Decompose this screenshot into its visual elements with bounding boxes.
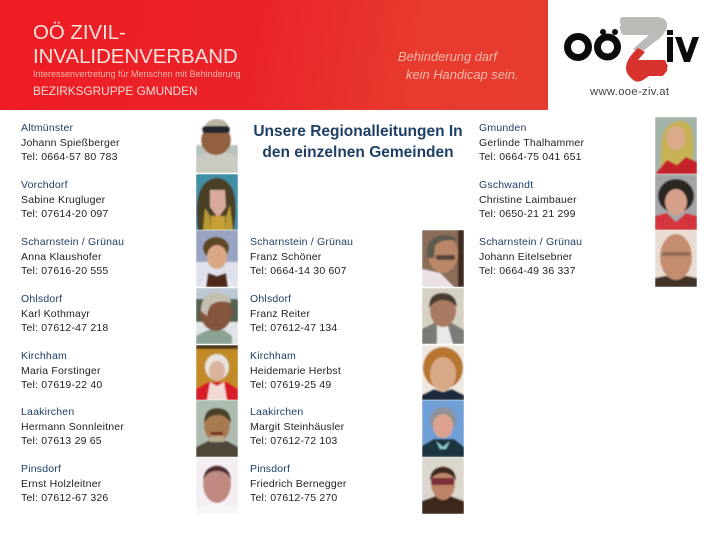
website: www.ooe-ziv.at: [590, 86, 669, 98]
contact: Scharnstein Schöner: Franz Schöner: [250, 250, 321, 262]
contact: Laakirchen Sonnleitner: [21, 406, 124, 447]
header banner: [0, 0, 548, 110]
contact: Altmünster: Altmünster: [21, 122, 73, 134]
photo: Eitelsebner: [655, 230, 697, 287]
contact: Scharnstein Eitelsebner: Scharnstein / Grünau: [479, 236, 582, 248]
contact: Ohlsdorf Reiter: Franz Reiter: [250, 308, 310, 320]
contact: Kirchham Herbst: Tel: 07619-25 49: [250, 379, 331, 391]
contact: Kirchham Herbst: [250, 350, 341, 391]
contact: Pinsdorf Bernegger: [250, 463, 347, 504]
heading: regional leaders: [253, 123, 463, 161]
contact: Kirchham Herbst: Kirchham: [250, 350, 296, 362]
contact: Laakirchen Sonnleitner: Laakirchen: [21, 406, 74, 418]
letters iv: [667, 30, 699, 62]
photo: Schöner: [422, 230, 464, 287]
contact: Kirchham Forstinger: Maria Forstinger: [21, 364, 101, 376]
organisation name: INVALIDENVERBAND: [33, 46, 238, 68]
photo: Laimbauer: [655, 174, 697, 230]
contact: Laakirchen Steinhäusler: Margit Steinhäusler: [250, 420, 344, 432]
heading: regional leaders: Unsere Regionalleitungen In: [253, 123, 463, 140]
organisation name: [33, 22, 238, 68]
contact: Gmunden: Gmunden: [479, 122, 527, 134]
heading: regional leaders: den einzelnen Gemeinden: [262, 144, 454, 161]
contact: Ohlsdorf Kothmayr: Karl Kothmayr: [21, 308, 90, 320]
contact: Ohlsdorf Kothmayr: Tel: 07612-47 218: [21, 322, 108, 334]
contact: Ohlsdorf Kothmayr: [21, 293, 108, 334]
contact: Ohlsdorf Reiter: [250, 293, 337, 334]
contact: Vorchdorf: [21, 179, 108, 220]
contact: Kirchham Forstinger: [21, 350, 102, 391]
contact: Pinsdorf Holzleitner: Tel: 07612-67 326: [21, 492, 108, 504]
contact: Scharnstein Schöner: Tel: 0664-14 30 607: [250, 265, 347, 277]
contact: Altmünster: Johann Spießberger: [21, 136, 120, 148]
contact: Gschwandt: Tel: 0650-21 21 299: [479, 208, 576, 220]
contact: Scharnstein Eitelsebner: [479, 236, 582, 277]
photo: Bernegger: [422, 457, 464, 514]
portraits: [196, 117, 697, 514]
contact: Kirchham Forstinger: Kirchham: [21, 350, 67, 362]
contact: Gmunden: Gerlinde Thalhammer: [479, 136, 584, 148]
photo: Klaushofer: [196, 230, 238, 287]
icon: grey hand: [620, 17, 667, 54]
photo: Holzleitner: [196, 457, 238, 514]
contact: Gschwandt: [479, 179, 577, 220]
contact: Laakirchen Steinhäusler: Laakirchen: [250, 406, 303, 418]
contact: Altmünster: [21, 122, 120, 163]
slogan: Behinderung darf: [398, 49, 497, 64]
contact: Laakirchen Sonnleitner: Hermann Sonnleitner: [21, 420, 124, 432]
slogan: kein Handicap sein.: [406, 67, 519, 82]
contact: Laakirchen Sonnleitner: Tel: 07613 29 65: [21, 435, 102, 447]
photo: Herbst: [422, 345, 464, 400]
contact: Scharnstein Klaushofer: Scharnstein / Grünau: [21, 236, 124, 248]
contact: Vorchdorf: Sabine Krugluger: [21, 194, 105, 206]
contact: Kirchham Herbst: Heidemarie Herbst: [250, 364, 341, 376]
organisation name: OÖ ZIVIL-: [33, 22, 126, 44]
contact: Gschwandt: Gschwandt: [479, 179, 533, 191]
logo: oöZiv: [564, 17, 699, 98]
contact: Scharnstein Klaushofer: Tel: 07616-20 555: [21, 265, 108, 277]
photo: Steinhäusler: [422, 400, 464, 457]
contact: Laakirchen Steinhäusler: [250, 406, 344, 447]
subtitle: Interessenvertretung für Menschen mit Behinderung: [33, 69, 241, 79]
contact: Pinsdorf Holzleitner: Pinsdorf: [21, 463, 61, 475]
contact: Ohlsdorf Reiter: Ohlsdorf: [250, 293, 291, 305]
contact: Scharnstein Klaushofer: [21, 236, 124, 277]
photo: Forstinger: [196, 345, 238, 400]
photo: Spießberger: [196, 119, 238, 173]
contact: Scharnstein Klaushofer: Anna Klaushofer: [21, 250, 102, 262]
contact: Pinsdorf Bernegger: Friedrich Bernegger: [250, 478, 347, 490]
photo: Thalhammer: [655, 117, 697, 174]
contact: Pinsdorf Bernegger: Tel: 07612-75 270: [250, 492, 337, 504]
contact: Scharnstein Schöner: [250, 236, 353, 277]
contact: Kirchham Forstinger: Tel: 07619-22 40: [21, 379, 102, 391]
contact: Gmunden: [479, 122, 584, 163]
contact: Pinsdorf Bernegger: Pinsdorf: [250, 463, 290, 475]
photo: Kothmayr: [196, 288, 238, 344]
contact: Pinsdorf Holzleitner: Ernst Holzleitner: [21, 478, 101, 490]
contact: Ohlsdorf Reiter: Tel: 07612-47 134: [250, 322, 337, 334]
contact: Vorchdorf: Tel: 07614-20 097: [21, 208, 108, 220]
district group: BEZIRKSGRUPPE GMUNDEN: [33, 84, 198, 98]
icon: red hand: [626, 48, 668, 82]
contact: Vorchdorf: Vorchdorf: [21, 179, 68, 191]
contact: Pinsdorf Holzleitner: [21, 463, 108, 504]
letters oö: [568, 36, 618, 58]
contact: Gmunden: Tel: 0664-75 041 651: [479, 151, 582, 163]
photo: Sonnleitner: [196, 400, 238, 457]
contact: Scharnstein Schöner: Scharnstein / Grünau: [250, 236, 353, 248]
contact: Gschwandt: Christine Laimbauer: [479, 194, 577, 206]
slogan: [398, 49, 519, 82]
contact: Scharnstein Eitelsebner: Johann Eitelsebner: [479, 250, 572, 262]
photo: Krugluger: [196, 174, 238, 230]
photo: Reiter: [422, 288, 464, 344]
contact: Altmünster: Tel: 0664-57 80 783: [21, 151, 118, 163]
contact: Ohlsdorf Kothmayr: Ohlsdorf: [21, 293, 62, 305]
contact: Scharnstein Eitelsebner: Tel: 0664-49 36 337: [479, 265, 576, 277]
contact: Laakirchen Steinhäusler: Tel: 07612-72 103: [250, 435, 337, 447]
